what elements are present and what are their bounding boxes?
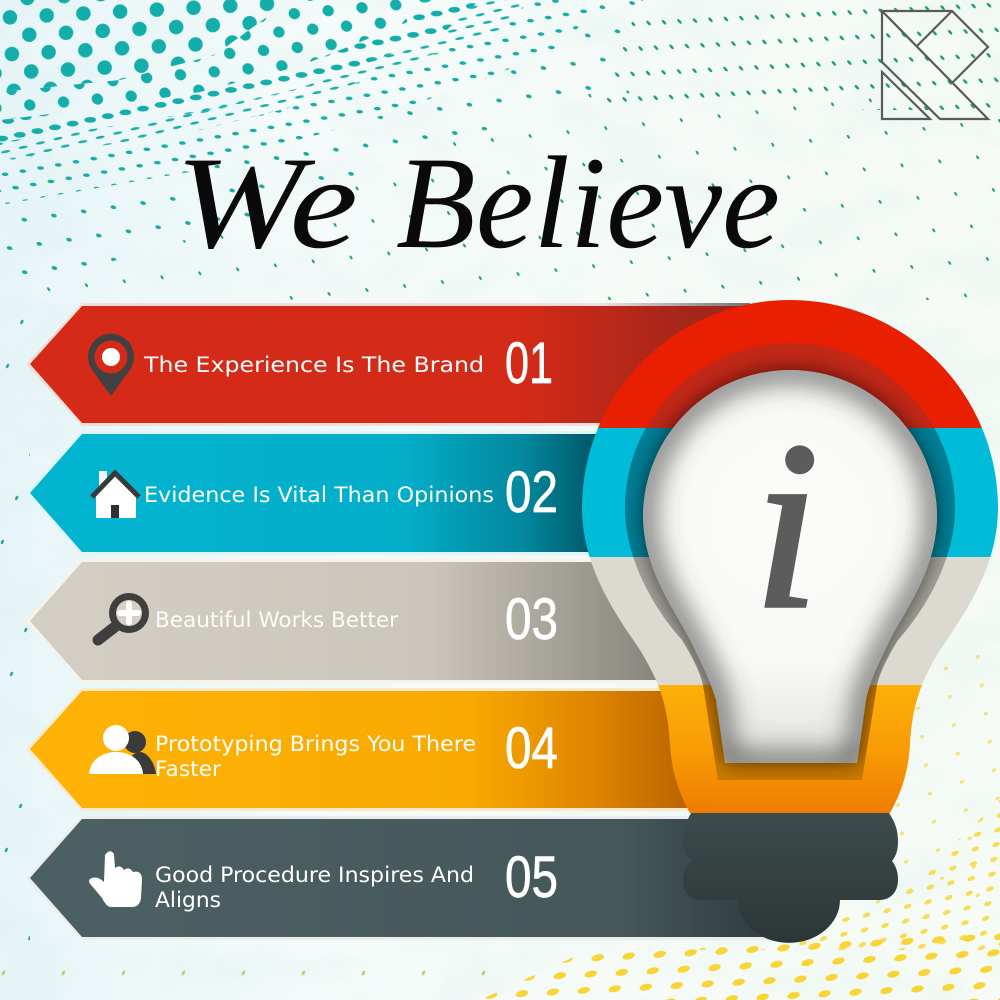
panel: banner 1	[26, 303, 760, 426]
panel: banner 3	[26, 559, 680, 683]
title: We	[175, 129, 358, 276]
text: item 5: Aligns	[155, 888, 221, 912]
letter i: i	[753, 392, 820, 658]
text: item 5	[155, 863, 474, 912]
title: Believe	[396, 129, 780, 276]
bulb base cap	[683, 813, 898, 943]
panel: banner 5	[26, 816, 790, 940]
number 04: 04	[505, 716, 558, 781]
icon: house	[92, 471, 139, 518]
panel: banner 4	[26, 688, 700, 811]
text: item 4: Faster	[155, 757, 221, 781]
text: item 4: Prototyping Brings You There	[155, 732, 476, 756]
icon: people	[89, 725, 156, 774]
logo	[882, 11, 988, 119]
text: item 3: Beautiful Works Better	[155, 608, 398, 632]
title	[175, 129, 780, 276]
bulb inner shadow ring	[625, 343, 955, 780]
text: item 5: Good Procedure Inspires And	[155, 863, 474, 887]
icon: magnifier	[98, 593, 149, 640]
text: item 4	[155, 732, 476, 781]
background: teal halftone dots top left	[0, 0, 640, 295]
background: green dots top right	[0, 0, 1000, 300]
light bulb	[570, 290, 1000, 943]
icon: map pin	[88, 334, 134, 396]
text: item 2: Evidence Is Vital Than Opinions	[144, 483, 494, 507]
panel: banner 2	[26, 431, 640, 555]
number 03: 03	[505, 587, 558, 652]
number 02: 02	[505, 460, 558, 525]
bulb glass	[643, 370, 937, 763]
bulb coloured bands	[570, 290, 1000, 813]
number 01: 01	[505, 331, 553, 396]
background: yellow halftone dots bottom right	[0, 640, 1000, 1000]
number 05: 05	[505, 845, 558, 910]
text: item 1: The Experience Is The Brand	[143, 353, 484, 377]
icon: pointing hand	[89, 851, 142, 907]
background: sparse dots left edge	[0, 300, 30, 960]
